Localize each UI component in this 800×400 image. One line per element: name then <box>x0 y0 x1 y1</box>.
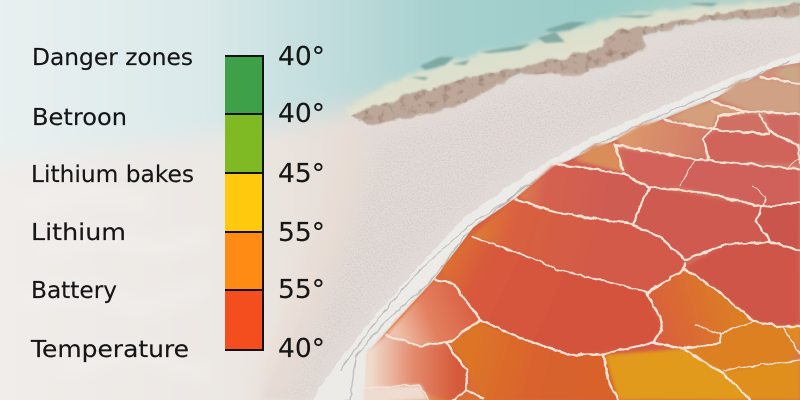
dark fissure in the crust <box>340 185 530 370</box>
value: 55 degrees: 55° <box>278 218 325 248</box>
label: Temperature: Temperature <box>30 335 189 363</box>
temperature colour scale <box>225 56 263 350</box>
bright salt band along pond rim <box>312 52 800 400</box>
label: Lithium bakes: Lithium bakes <box>31 160 194 188</box>
ridge mottling <box>350 4 800 126</box>
segment: red <box>225 290 263 350</box>
pond polygons <box>364 66 800 400</box>
label: Lithium: Lithium <box>31 218 126 246</box>
value: 40 degrees: 40° <box>278 99 325 129</box>
label: Betroon: Betroon <box>32 103 127 131</box>
segment: orange <box>225 232 263 290</box>
turquoise brine water <box>0 0 800 165</box>
faint ripples in the left salt <box>20 190 210 375</box>
scale outline and dividers <box>225 56 263 350</box>
segment: lime <box>225 114 263 173</box>
value: 45 degrees: 45° <box>278 159 325 189</box>
value: 40 degrees: 40° <box>278 334 325 364</box>
pond base colour <box>364 63 800 400</box>
label: Battery: Battery <box>31 276 117 304</box>
brown mineral ridge along the shoreline <box>350 4 800 126</box>
segment: green <box>225 56 263 114</box>
value: 40 degrees: 40° <box>278 42 325 72</box>
cream shallow shoreline <box>345 2 800 118</box>
label: Danger zones: Danger zones <box>32 43 193 71</box>
value: 55 degrees: 55° <box>278 275 325 305</box>
white salt crust <box>260 18 800 400</box>
grey channel line in the crust <box>350 62 790 400</box>
temperature values <box>278 42 325 364</box>
category labels <box>30 43 194 363</box>
salt cracks between ponds <box>365 77 800 400</box>
evaporation ponds <box>364 63 800 400</box>
pale pink sand beside crust <box>250 135 365 400</box>
segment: yellow <box>225 173 263 232</box>
crust speckle <box>270 25 800 400</box>
dark patches in water <box>410 3 718 80</box>
